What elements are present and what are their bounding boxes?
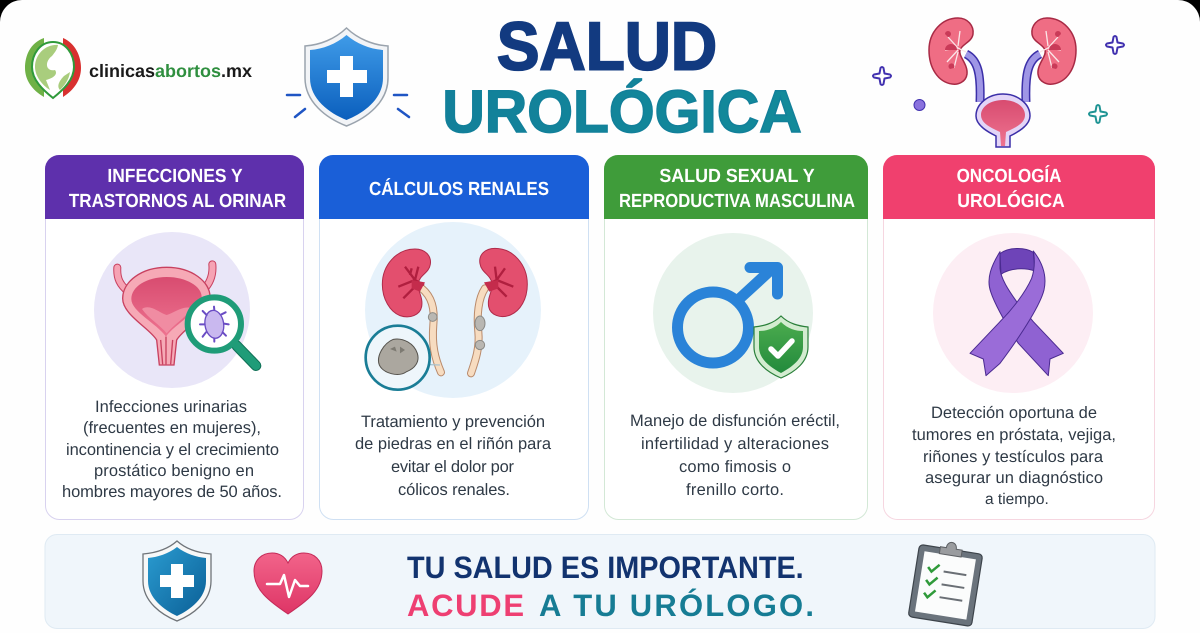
header text bbox=[619, 166, 855, 212]
header text bbox=[69, 166, 286, 212]
body text: evitar el dolor por bbox=[391, 458, 514, 476]
body text: Infecciones urinarias bbox=[95, 398, 247, 416]
body text: incontinencia y el crecimiento bbox=[66, 441, 279, 459]
header text bbox=[957, 165, 1065, 212]
body text bbox=[912, 404, 1116, 508]
body text: Detección oportuna de bbox=[931, 404, 1097, 422]
callout text: TU SALUD ES IMPORTANTE. bbox=[407, 550, 804, 585]
body text: riñones y testículos para bbox=[923, 448, 1104, 466]
icon: male symbol with shield bbox=[653, 233, 813, 393]
title: SALUD bbox=[497, 8, 717, 84]
body text bbox=[355, 413, 552, 499]
icon: blue shield with cross bbox=[287, 28, 409, 126]
body text: prostático benigno en bbox=[94, 462, 254, 480]
body text: cólicos renales. bbox=[398, 481, 510, 499]
callout text: ACUDE bbox=[407, 588, 526, 623]
panel header bbox=[319, 155, 589, 219]
panel header bbox=[604, 155, 868, 219]
body text: infertilidad y alteraciones bbox=[641, 435, 829, 453]
body text: hombres mayores de 50 años. bbox=[62, 483, 282, 501]
logo wordmark: clinicasabortos.mx bbox=[89, 61, 252, 81]
header text: UROLÓGICA bbox=[957, 190, 1065, 212]
panel header bbox=[45, 155, 304, 219]
body text: de piedras en el riñón para bbox=[355, 435, 552, 453]
icon: bladder with magnifying glass bbox=[94, 232, 256, 388]
panel: salud sexual y reproductiva masculina bbox=[604, 155, 868, 520]
body text bbox=[630, 412, 840, 499]
panel: calculos renales bbox=[319, 155, 589, 520]
body text bbox=[62, 398, 282, 501]
callout text bbox=[407, 550, 816, 623]
header text: REPRODUCTIVA MASCULINA bbox=[619, 191, 855, 212]
panel header bbox=[883, 155, 1155, 219]
icon: urinary system bbox=[873, 18, 1124, 147]
callout text: A TU URÓLOGO. bbox=[539, 588, 816, 623]
icon: clipboard checklist bbox=[908, 537, 984, 627]
body text: como fimosis o bbox=[679, 458, 791, 476]
panel: oncologia urologica bbox=[883, 155, 1155, 520]
body text: (frecuentes en mujeres), bbox=[83, 419, 261, 437]
icon: footer shield bbox=[143, 541, 211, 621]
icon: purple ribbon bbox=[933, 233, 1093, 393]
header text: SALUD SEXUAL Y bbox=[659, 166, 815, 187]
body text: a tiempo. bbox=[985, 491, 1049, 508]
header text: TRASTORNOS AL ORINAR bbox=[69, 191, 286, 212]
body text: tumores en próstata, vejiga, bbox=[912, 426, 1116, 444]
header text: INFECCIONES Y bbox=[107, 166, 243, 187]
header text: CÁLCULOS RENALES bbox=[369, 178, 549, 200]
panel: footer banner bbox=[45, 534, 1155, 628]
icon: heart with pulse bbox=[254, 553, 322, 614]
body text: Manejo de disfunción eréctil, bbox=[630, 412, 840, 430]
body text: Tratamiento y prevención bbox=[361, 413, 545, 431]
decorative sparkles bbox=[873, 36, 1124, 123]
header text: ONCOLOGÍA bbox=[957, 165, 1062, 187]
body text: asegurar un diagnóstico bbox=[925, 469, 1103, 487]
body text: frenillo corto. bbox=[686, 481, 784, 499]
title bbox=[442, 8, 802, 145]
panel: infecciones y trastornos al orinar bbox=[45, 155, 304, 520]
logo: clinicasabortos.mx bbox=[25, 38, 252, 98]
icon: kidneys with stones bbox=[365, 222, 541, 398]
title: UROLÓGICA bbox=[442, 78, 802, 145]
